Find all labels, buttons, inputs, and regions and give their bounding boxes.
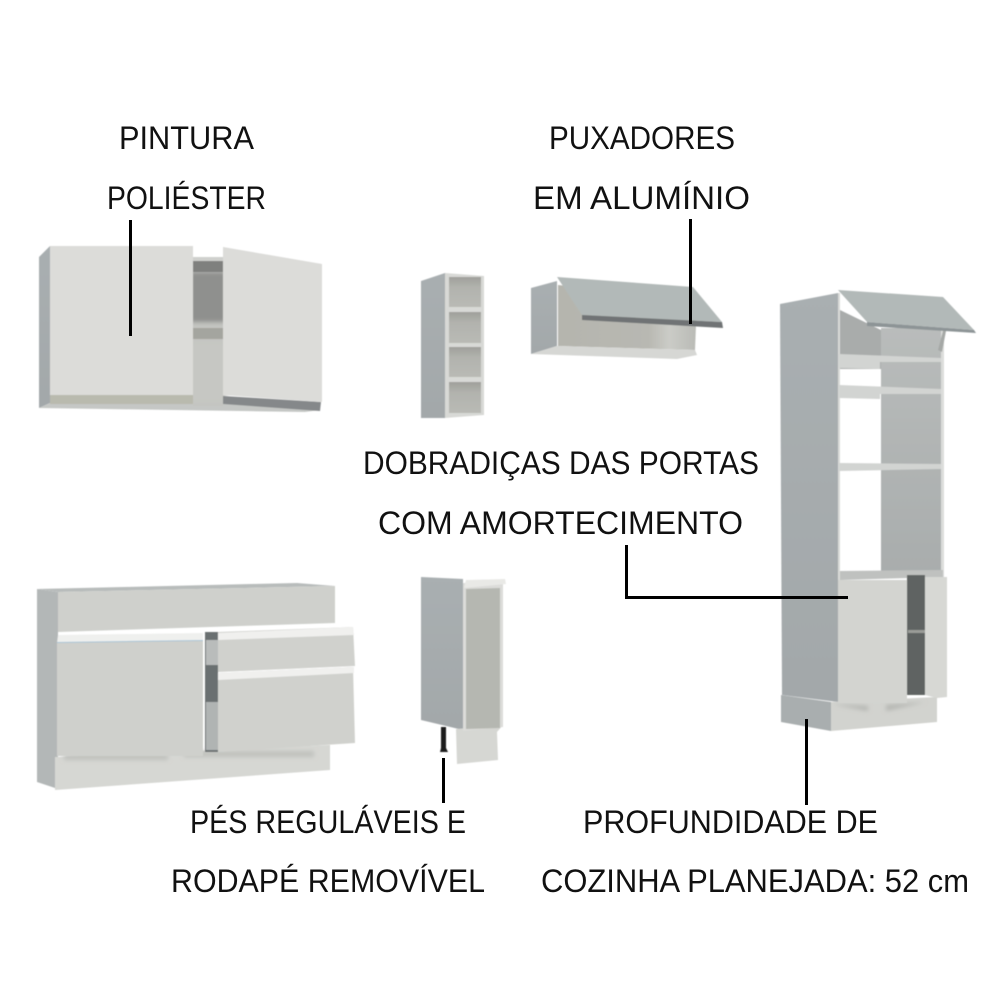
leader line: profundidade — [805, 719, 808, 805]
base cabinet with door and drawers — [37, 583, 355, 790]
label: pés reguláveis — [171, 804, 485, 899]
label: profundidade — [541, 804, 969, 899]
label: pés reguláveis: PÉS REGULÁVEIS E — [190, 804, 466, 840]
leader line: pés — [442, 758, 445, 803]
label: profundidade: COZINHA PLANEJADA: 52 cm — [541, 863, 969, 899]
label: profundidade: PROFUNDIDADE DE — [583, 804, 878, 840]
label: puxadores em alumínio — [533, 120, 750, 216]
label: puxadores em alumínio: EM ALUMÍNIO — [533, 180, 750, 216]
label: pintura poliéster — [107, 120, 266, 216]
label: dobradiças — [363, 445, 759, 541]
label: pintura poliéster: PINTURA — [119, 120, 255, 156]
leader line: pintura — [129, 220, 132, 336]
label: puxadores em alumínio: PUXADORES — [549, 120, 735, 156]
tall oven tower cabinet — [780, 290, 976, 731]
leader line: puxadores — [689, 219, 692, 324]
wall cabinet with lift-up door — [531, 277, 723, 359]
leader line: dobradiças — [626, 545, 848, 598]
label: pés reguláveis: RODAPÉ REMOVÍVEL — [171, 863, 485, 899]
label: dobradiças: DOBRADIÇAS DAS PORTAS — [363, 445, 759, 481]
label: pintura poliéster: POLIÉSTER — [107, 180, 266, 216]
narrow base cabinet with adjustable foot — [421, 577, 506, 764]
wall niche with open shelves — [421, 273, 484, 418]
label: dobradiças: COM AMORTECIMENTO — [378, 505, 743, 541]
wall cabinet with two doors — [39, 246, 322, 412]
